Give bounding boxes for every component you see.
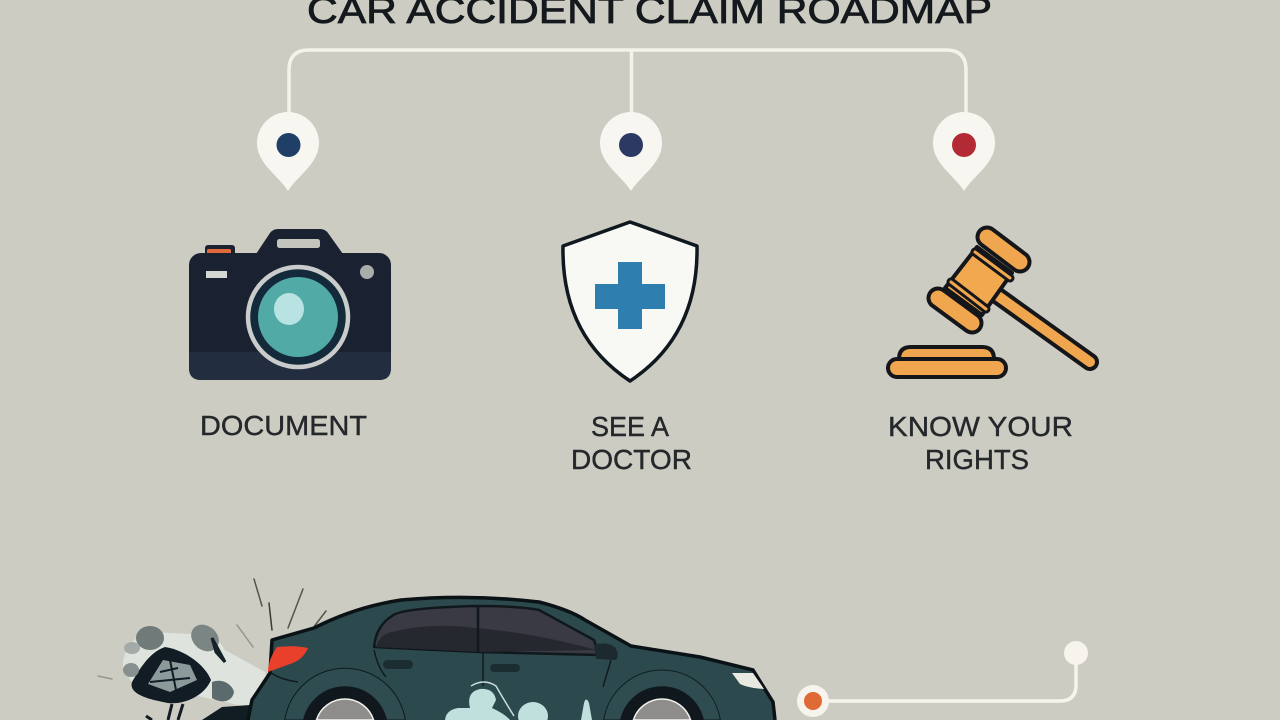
car windows (374, 606, 599, 655)
map pin 1 (257, 112, 319, 191)
route marker with line (797, 641, 1088, 717)
icon: medical shield (563, 222, 697, 381)
icon: camera (189, 229, 391, 380)
roadmap connector lines (289, 50, 966, 115)
paint splash on door (445, 682, 592, 720)
car (248, 597, 775, 720)
car body outline (248, 597, 775, 720)
map pin 2 (600, 112, 662, 191)
door handles (383, 660, 520, 672)
crash debris splash (123, 619, 268, 720)
step 2: see a doctor (563, 112, 697, 475)
label: know your rights: KNOW YOUR (888, 411, 1073, 442)
label: see a doctor: DOCTOR (571, 444, 692, 475)
side mirror (594, 643, 618, 660)
tail light (268, 646, 308, 672)
step 3: know your rights (888, 112, 1090, 475)
label: document: DOCUMENT (200, 410, 367, 441)
label: see a doctor (571, 411, 692, 475)
map pin 3 (933, 112, 995, 191)
car body fill (248, 597, 775, 720)
label: know your rights (888, 411, 1073, 475)
door lines (271, 650, 611, 687)
label: see a doctor: SEE A (591, 411, 669, 442)
impact marks (98, 579, 326, 679)
rear wheel (285, 668, 405, 720)
icon: gavel (888, 237, 1090, 377)
front wheel (604, 670, 720, 720)
headlight (732, 673, 764, 689)
step 1: document (189, 112, 391, 441)
label: know your rights: RIGHTS (925, 444, 1029, 475)
